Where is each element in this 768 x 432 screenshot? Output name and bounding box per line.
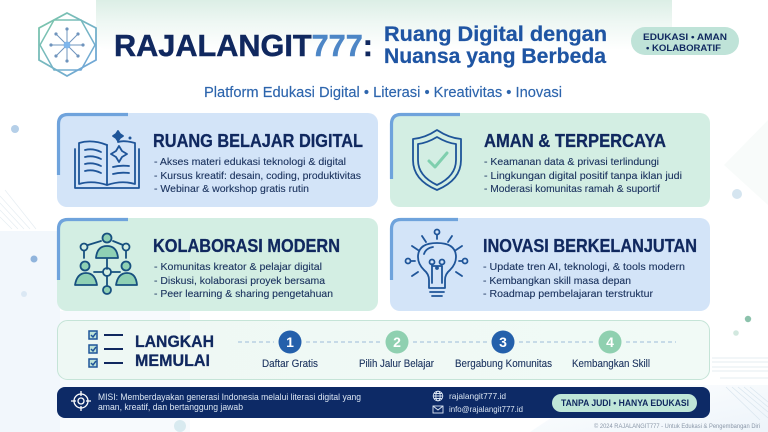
contact <box>449 391 523 414</box>
panel: inovasi berkelanjutan: - Update tren AI, teknologi, & tools modern <box>483 261 685 273</box>
panel: langkah memulai <box>58 320 710 380</box>
contact: info@rajalangit777.id <box>449 404 523 414</box>
panel: inovasi berkelanjutan: - Roadmap pembelajaran terstruktur <box>483 288 653 300</box>
heading: langkah memulai: MEMULAI <box>135 351 210 370</box>
step 3: 3 <box>499 334 507 350</box>
panel: inovasi berkelanjutan: - Kembangkan skill masa depan <box>483 275 631 287</box>
badge: tanpa judi <box>552 394 697 412</box>
step 3: Bergabung Komunitas <box>455 358 552 370</box>
icon: open book <box>75 131 139 188</box>
panel: kolaborasi modern <box>57 218 378 311</box>
panel: aman dan terpercaya: - Keamanan data & privasi terlindungi <box>484 156 659 168</box>
footer: © 2024 RAJALANGIT777 - Untuk Edukasi & Pengembangan Diri <box>594 423 760 430</box>
heading: langkah memulai <box>135 332 214 370</box>
mission text: aman, kreatif, dan bertanggung jawab <box>98 402 243 413</box>
panel: aman dan terpercaya: AMAN & TERPERCAYA <box>484 130 666 151</box>
panel: ruang belajar digital: RUANG BELAJAR DIGITAL <box>153 130 363 151</box>
step 2 <box>359 330 434 370</box>
badge: tanpa judi: TANPA JUDI • HANYA EDUKASI <box>561 398 689 408</box>
icon: network of people <box>75 234 137 294</box>
subtitle <box>384 23 607 68</box>
header banner <box>96 0 672 50</box>
panel: ruang belajar digital: - Webinar & workshop gratis rutin <box>154 183 309 195</box>
step 4: 4 <box>606 334 614 350</box>
panel: inovasi berkelanjutan: INOVASI BERKELANJUTAN <box>483 235 697 256</box>
badge <box>631 27 739 55</box>
panel: mission bar <box>57 387 710 418</box>
subtitle: Nuansa yang Berbeda <box>384 45 606 68</box>
title: RAJALANGIT777: <box>114 28 373 63</box>
panel: kolaborasi modern: - Peer learning & sharing pengetahuan <box>154 288 333 300</box>
panel: inovasi berkelanjutan <box>390 218 710 311</box>
icon: shield <box>413 130 461 190</box>
badge: EDUKASI • AMAN <box>643 32 727 43</box>
tagline: Platform Edukasi Digital • Literasi • Kreativitas • Inovasi <box>204 85 562 101</box>
panel: ruang belajar digital: - Akses materi edukasi teknologi & digital <box>154 156 346 168</box>
panel: kolaborasi modern: - Komunitas kreator & pelajar digital <box>154 261 322 273</box>
panel: aman dan terpercaya <box>390 113 710 207</box>
step 1: Daftar Gratis <box>262 358 318 370</box>
step 3 <box>455 330 552 370</box>
icon: target <box>71 391 91 411</box>
panel: kolaborasi modern: - Diskusi, kolaborasi proyek bersama <box>154 275 325 287</box>
badge: • KOLABORATIF <box>646 43 721 54</box>
icon: checklist <box>89 331 123 367</box>
icon: light bulb <box>406 230 468 296</box>
mission text: MISI: Memberdayakan generasi Indonesia melalui literasi digital yang <box>98 392 361 403</box>
step 2: Pilih Jalur Belajar <box>359 358 434 370</box>
contact: rajalangit777.id <box>449 391 506 401</box>
step 4: Kembangkan Skill <box>572 358 650 370</box>
background decoration <box>0 120 768 432</box>
panel: aman dan terpercaya: - Lingkungan digital positif tanpa iklan judi <box>484 170 682 182</box>
step 2: 2 <box>393 334 401 350</box>
icon: globe <box>433 391 443 401</box>
mission text <box>98 392 361 413</box>
logo <box>39 13 96 76</box>
subtitle: Ruang Digital dengan <box>384 23 607 46</box>
step 1 <box>262 330 318 370</box>
step 4 <box>572 330 650 370</box>
panel: aman dan terpercaya: - Moderasi komunitas ramah & suportif <box>484 183 660 195</box>
heading: langkah memulai: LANGKAH <box>135 332 214 351</box>
icon: envelope <box>433 406 443 413</box>
step 1: 1 <box>286 334 294 350</box>
panel: ruang belajar digital: - Kursus kreatif: desain, coding, produktivitas <box>154 170 361 182</box>
panel: ruang belajar digital <box>57 113 378 207</box>
panel: kolaborasi modern: KOLABORASI MODERN <box>153 235 340 256</box>
